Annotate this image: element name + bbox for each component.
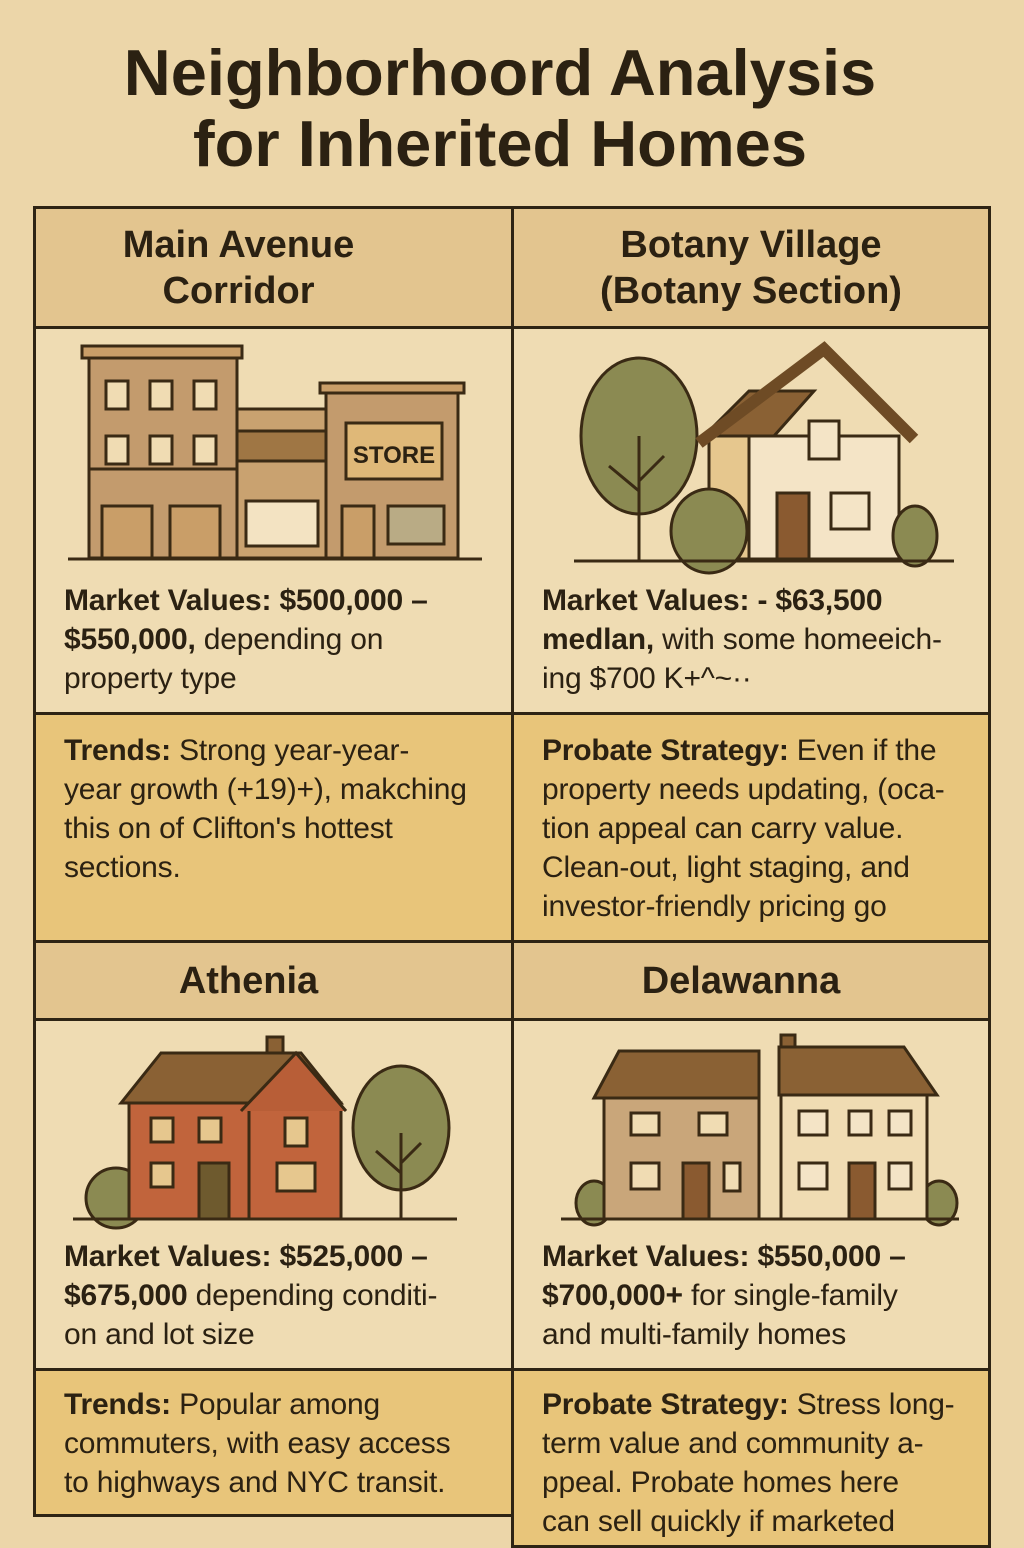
panel: Main Avenue trends: year growth (+19)+), makching [64, 773, 467, 806]
title [124, 36, 876, 180]
panel: Delawanna strategy: can sell quickly if marketed [542, 1505, 895, 1538]
panel: Delawanna strategy: term value and community a- [542, 1427, 923, 1460]
panel: Main Avenue body [33, 326, 514, 715]
panel: Main Avenue trends: sections. [64, 851, 181, 884]
panel: Athenia trends: to highways and NYC transit. [64, 1466, 445, 1499]
panel: Athenia body [33, 1018, 514, 1371]
title: Neighborhoord Analysis [124, 36, 876, 109]
text: market values: medlan, with some homeeich- [542, 623, 942, 656]
panel: Botany Village header: (Botany Section) [600, 270, 902, 312]
text: market values: on and lot size [64, 1318, 254, 1351]
icon: storefront buildings [68, 344, 482, 560]
title: for Inherited Homes [193, 107, 807, 180]
panel: Main Avenue trends: this on of Clifton's hottest [64, 812, 393, 845]
icon: storefront buildings: STORE [353, 442, 435, 469]
icon: house with trees [574, 341, 954, 574]
panel: Delawanna body [511, 1018, 991, 1371]
panel: Athenia header: Athenia [179, 960, 318, 1002]
panel: Botany body [511, 326, 991, 715]
text: market values: property type [64, 662, 236, 695]
text: market values [542, 1240, 906, 1351]
text: market values: and multi-family homes [542, 1318, 846, 1351]
panel: Main Avenue header: Corridor [162, 270, 314, 312]
panel: Delawanna strategy: ppeal. Probate homes here [542, 1466, 899, 1499]
icon: red house with tree [73, 1036, 457, 1230]
text: market values [64, 584, 428, 695]
panel: Main Avenue header: Main Avenue [123, 224, 354, 266]
text: market values: Market Values: $525,000 – [64, 1240, 428, 1273]
panel: Botany Village header: Botany Village [620, 224, 882, 266]
panel: Botany strategy: tion appeal can carry value. [542, 812, 903, 845]
text: market values: $550,000, depending on [64, 623, 383, 656]
text: market values: Market Values: $550,000 – [542, 1240, 906, 1273]
panel: Botany strategy: Clean-out, light staging, and [542, 851, 910, 884]
text: market values: Market Values: $500,000 – [64, 584, 428, 617]
panel: Main Avenue header [33, 206, 514, 329]
icon: two houses [561, 1034, 959, 1226]
panel: Main Avenue trends [33, 712, 514, 943]
panel: Athenia trends: commuters, with easy access [64, 1427, 450, 1460]
panel: Botany strategy: investor-friendly pricing go [542, 890, 887, 923]
panel: Delawanna header: Delawanna [642, 960, 840, 1002]
text: market values: Market Values: - $63,500 [542, 584, 882, 617]
text: market values: $700,000+ for single-family [542, 1279, 898, 1312]
panel: Athenia header [33, 940, 514, 1021]
text: market values: $675,000 depending conditi- [64, 1279, 437, 1312]
text: market values [542, 584, 942, 695]
panel: Botany strategy: property needs updating, (oca- [542, 773, 945, 806]
panel: Delawanna strategy: Probate Strategy: Stress long- [542, 1388, 954, 1421]
text: market values: ing $700 K+^~·· [542, 662, 752, 695]
panel: Botany strategy [511, 712, 991, 943]
text: market values [64, 1240, 437, 1351]
panel: Athenia trends [33, 1368, 514, 1517]
panel: Botany strategy: Probate Strategy: Even if the [542, 734, 936, 767]
panel: Athenia trends: Trends: Popular among [64, 1388, 380, 1421]
panel: Delawanna header [511, 940, 991, 1021]
panel: Delawanna strategy [511, 1368, 991, 1548]
panel: Botany Village header [511, 206, 991, 329]
panel: Main Avenue trends: Trends: Strong year-year- [64, 734, 409, 767]
